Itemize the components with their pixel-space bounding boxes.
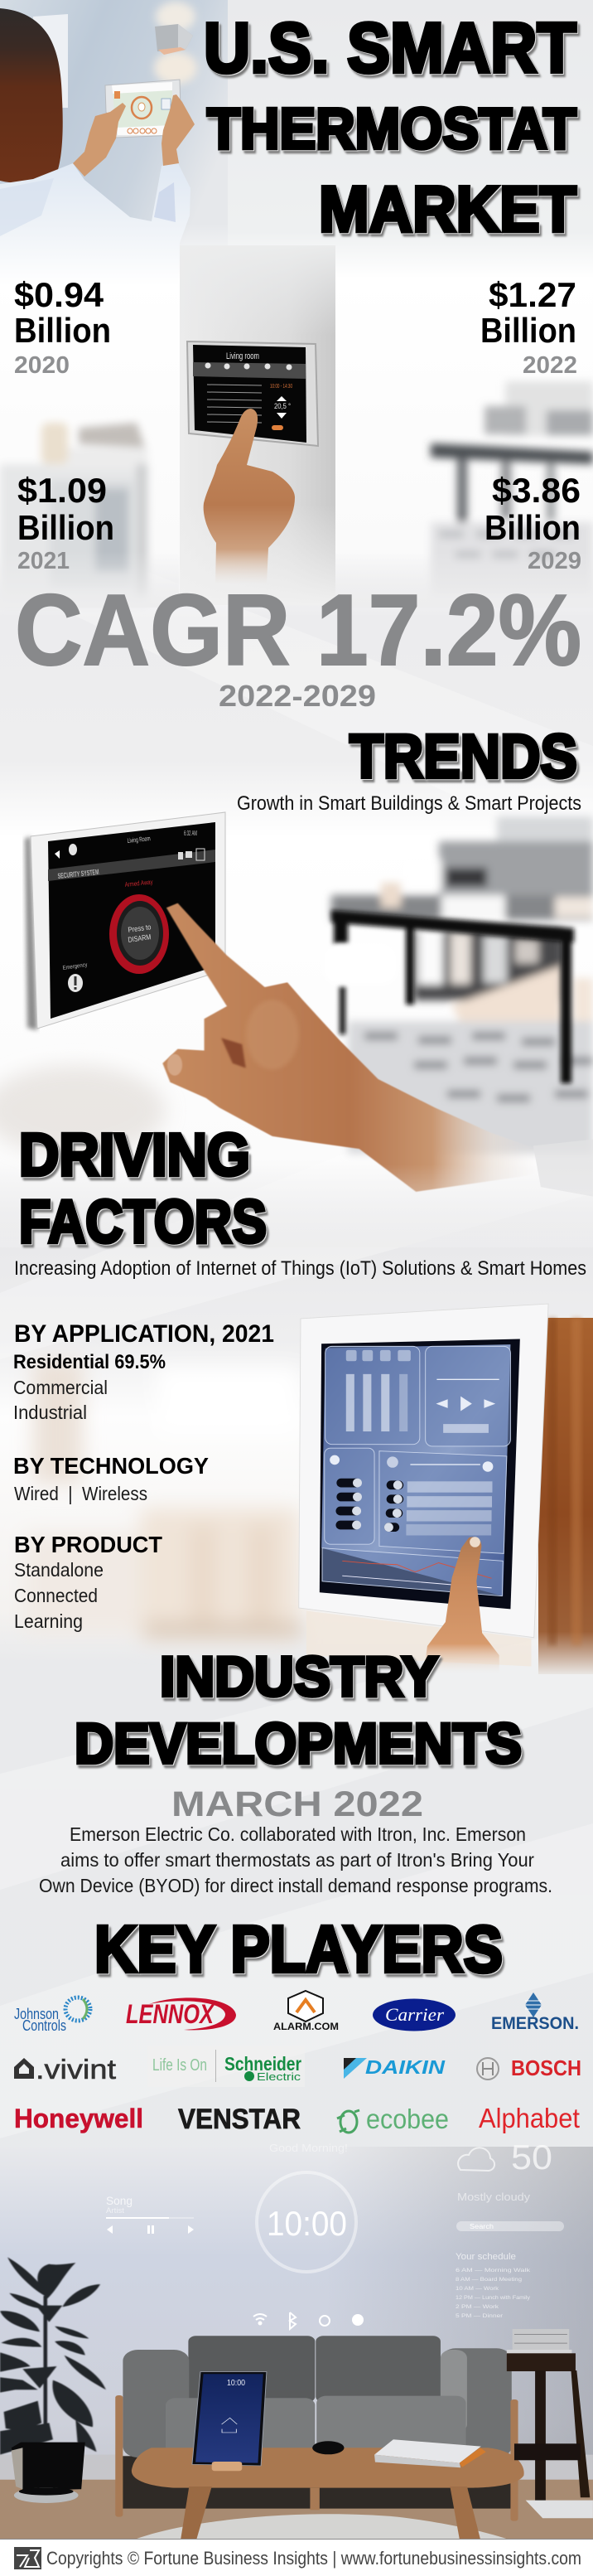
photo: living room (0, 2138, 593, 2540)
driving factors heading: FACTORS (19, 1189, 267, 1256)
development text (39, 1823, 552, 1896)
stat: 2021: $1.09 (17, 471, 107, 510)
hands and wrists (73, 94, 195, 177)
screen overlay: music player (106, 2194, 194, 2234)
development text: Emerson Electric Co. collaborated with Itron, Inc. Emerson (70, 1823, 526, 1845)
by application: BY APPLICATION, 2021 (14, 1320, 274, 1348)
CAGR period: 2022-2029 (219, 679, 376, 713)
screen overlay: status icons (253, 2312, 363, 2329)
fade of photos into CAGR band (0, 551, 179, 608)
screen overlay: search bar (456, 2221, 564, 2231)
screen overlay: schedule: 5 PM — Dinner (456, 2314, 503, 2319)
logo: Schneider Electric: Life Is On (152, 2056, 207, 2075)
thermostat tablet: 10:00 - 14:30 (270, 384, 292, 390)
by application: Industrial (13, 1402, 87, 1423)
pointing hand (204, 409, 295, 584)
stat: 2029: $3.86 (492, 471, 581, 510)
photo: blurred room behind trends hand (323, 816, 593, 1154)
photo: blurred dining table right (431, 381, 593, 597)
stat: 2022: 2022 (523, 352, 577, 379)
wood door edge (538, 1318, 593, 1674)
industry developments heading (75, 1645, 522, 1775)
toggles (335, 1479, 403, 1532)
fade right (335, 551, 593, 608)
logo: Bosch (477, 2055, 581, 2080)
security tablet: SECURITY SYSTEM (57, 868, 99, 880)
title: THERMOSTAT (207, 96, 576, 161)
photo: woman using tablet (0, 0, 228, 286)
white shirt (0, 163, 190, 286)
key players heading: KEY PLAYERS (94, 1912, 503, 1986)
screen overlay: schedule: 8 AM — Board Meeting (456, 2278, 522, 2283)
screen overlay: schedule (456, 2252, 532, 2319)
fade below hand (0, 1165, 593, 1247)
speaker (312, 2441, 345, 2454)
logo: ecobee: ecobee (366, 2104, 449, 2134)
stat: 2022: Billion (480, 311, 576, 350)
logo: Daikin (344, 2056, 445, 2079)
tablet frame (299, 1304, 548, 1638)
logo: Schneider Electric: Electric (257, 2070, 301, 2083)
logo: Honeywell: Honeywell (14, 2104, 143, 2133)
screen overlay: schedule: 12 PM — Lunch with Family (456, 2296, 530, 2301)
screen overlay: weather: 50 (511, 2138, 552, 2177)
hair (0, 8, 63, 183)
security tablet (25, 812, 225, 1030)
footer logo (14, 2547, 41, 2569)
logo: Johnson Controls: Johnson (14, 2006, 59, 2022)
security tablet: Living Room (127, 835, 151, 845)
floor (0, 2480, 593, 2539)
sleeve (533, 1140, 593, 1197)
by product: Standalone (14, 1559, 104, 1581)
plant pot (12, 2443, 85, 2503)
logo: Alphabet: Alphabet (479, 2103, 580, 2133)
rug (136, 2514, 507, 2539)
screen overlay: schedule: 10 AM — Work (456, 2287, 499, 2292)
stat: 2020 (14, 275, 111, 379)
disarm button: DISARM (128, 932, 152, 944)
screen overlay: clock (257, 2172, 356, 2272)
screen overlay: schedule: 2 PM — Work (456, 2305, 499, 2310)
industry developments heading: DEVELOPMENTS (75, 1712, 522, 1775)
photo: blurred kitchen left (0, 423, 147, 605)
sleeve shadow (154, 182, 176, 222)
security tablet: Armed Away (124, 878, 153, 889)
logo: Alarm.com (273, 1991, 339, 2032)
logo: Emerson (491, 1993, 579, 2033)
coffee table (132, 2448, 524, 2539)
screen (320, 1339, 520, 1609)
screen overlay: weather (269, 2138, 552, 2203)
driving factors heading (19, 1122, 267, 1256)
panels (322, 1346, 510, 1596)
by application: Residential 69.5% (13, 1351, 166, 1373)
sofa (115, 2336, 518, 2521)
title: MARKET (319, 172, 576, 245)
security tablet: Emergency (62, 962, 88, 971)
stat: 2022: $1.27 (489, 275, 576, 314)
smart home wall panel (299, 1304, 548, 1673)
stat: 2022 (480, 275, 577, 379)
screen overlay: schedule: Your schedule (456, 2252, 516, 2262)
stat: 2029 (485, 471, 581, 574)
logo: Schneider Electric (147, 2046, 305, 2087)
stat: 2029: Billion (485, 508, 581, 547)
title (204, 9, 576, 245)
stat: 2021 (17, 471, 114, 574)
by product: Learning (14, 1610, 83, 1632)
shadow under sofa (121, 2456, 514, 2509)
stat: 2020: 2020 (14, 352, 70, 379)
by technology: Wired | Wireless (14, 1483, 147, 1504)
screen overlay: weather: Good Morning! (269, 2142, 348, 2154)
footer (0, 2539, 593, 2576)
logo: Johnson Controls (14, 1997, 90, 2034)
by application (13, 1320, 274, 1423)
temperature chart line (342, 1561, 492, 1578)
by technology: BY TECHNOLOGY (13, 1453, 209, 1479)
thermostat tablet (187, 341, 318, 446)
side table with books (507, 2329, 593, 2518)
screen overlay: schedule: 6 AM — Morning Walk (456, 2269, 532, 2273)
stat: 2020: $0.94 (14, 275, 104, 314)
logo: Lennox: LENNOX (126, 1999, 215, 2029)
shadow between fingers (221, 1038, 246, 1068)
logo: Alarm.com: ALARM.COM (273, 2021, 339, 2032)
screen overlay: clock: 10:00 (267, 2204, 347, 2243)
logo: Venstar: VENSTAR (178, 2104, 301, 2135)
thermostat tablet: 20,5 ° (274, 402, 291, 410)
stat: 2020: Billion (14, 311, 111, 350)
by application: Commercial (13, 1377, 108, 1398)
by product: BY PRODUCT (14, 1532, 162, 1557)
by technology (13, 1453, 209, 1504)
development text: Own Device (BYOD) for direct install demand response programs. (39, 1875, 552, 1896)
window frame (33, 14, 68, 108)
wall lamp (154, 2, 197, 85)
security tablet: 6:32 AM (184, 830, 197, 837)
date: MARCH 2022 (171, 1784, 423, 1824)
by product: Connected (14, 1585, 98, 1606)
background facets (0, 514, 593, 2138)
logo: vivint: .vivint (36, 2054, 116, 2085)
wall shadow under tablet (0, 1065, 166, 1156)
screen overlay: music player: Song (106, 2194, 133, 2207)
logo: ecobee (337, 2104, 449, 2134)
touching finger (423, 1537, 499, 1673)
shirt shadow (0, 178, 54, 236)
logo: vivint (14, 2054, 116, 2085)
logo: Carrier (373, 1999, 456, 2031)
stat: 2029: 2029 (528, 548, 581, 574)
disarm button: Press to (128, 922, 152, 934)
stat: 2021: Billion (17, 508, 114, 547)
logo: Carrier: Carrier (385, 2004, 444, 2025)
small tablet (105, 80, 181, 138)
logo: Johnson Controls: Controls (22, 2017, 66, 2034)
houseplant (0, 2257, 106, 2455)
pointing hand and arm (162, 903, 593, 1197)
tablet on stand (192, 2372, 267, 2471)
logo: Schneider Electric: Schneider (224, 2053, 301, 2075)
thermostat tablet: Living room (226, 351, 259, 361)
screen overlay: search bar: Search (470, 2223, 494, 2230)
thumb nail (167, 1054, 182, 1076)
book on table (374, 2439, 486, 2467)
logo: Daikin: DAIKIN (365, 2056, 445, 2078)
by product (14, 1532, 162, 1632)
development text: aims to offer smart thermostats as part of Itron's Bring Your (60, 1849, 534, 1871)
industry developments heading: INDUSTRY (160, 1645, 438, 1708)
tablet time text: 10:00 (227, 2379, 245, 2388)
level bars (330, 1350, 499, 1535)
driving factors heading: DRIVING (19, 1122, 250, 1189)
photo: blurred curtain room (25, 1359, 302, 1641)
disarm button (109, 894, 169, 974)
logo: Emerson: EMERSON. (491, 2014, 579, 2033)
knuckle highlight (246, 1000, 299, 1069)
logo: Bosch: BOSCH (511, 2055, 581, 2080)
screen overlay: weather: Mostly cloudy (457, 2191, 531, 2203)
screen overlay: music player: Artist (106, 2206, 125, 2215)
photo: thermostat wall column (180, 245, 335, 605)
stat: 2021: 2021 (17, 548, 70, 574)
